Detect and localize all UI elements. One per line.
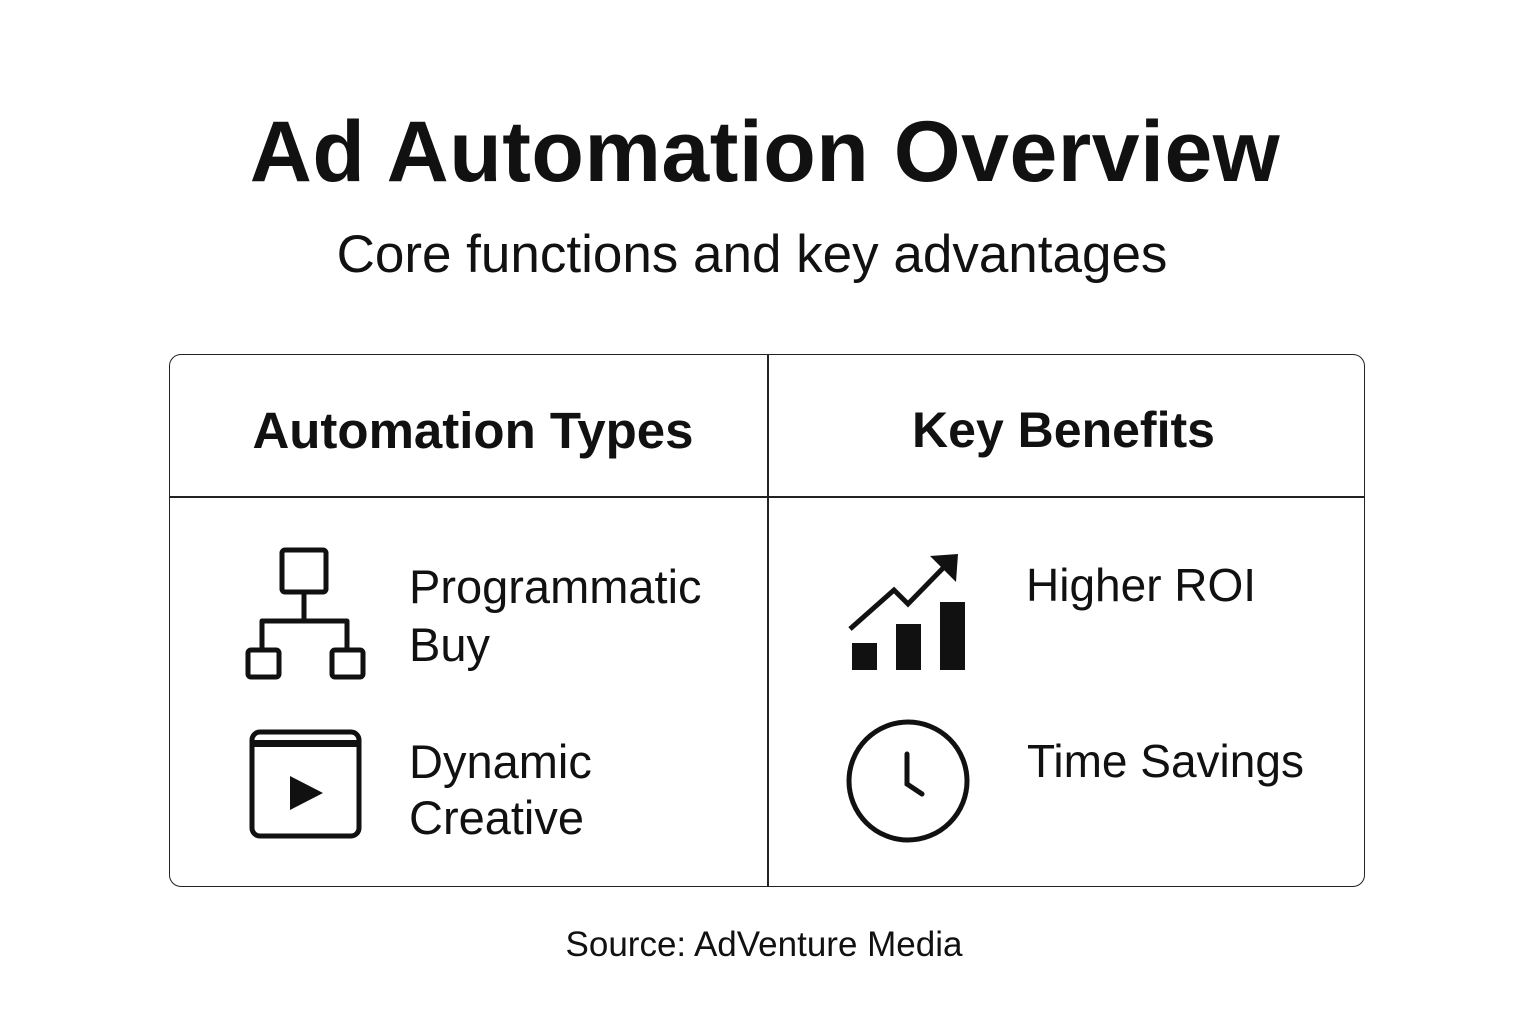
text: dynamic creative: Creative <box>409 791 584 844</box>
text: programmatic buy <box>409 560 702 671</box>
panel: automation types header: Automation Types <box>252 402 694 459</box>
vertical divider <box>767 355 769 886</box>
text: dynamic creative: Dynamic <box>409 735 592 788</box>
text: higher roi: Higher ROI <box>1026 559 1256 611</box>
text: time savings: Time Savings <box>1027 735 1304 787</box>
panel: key benefits header: Key Benefits <box>912 402 1215 458</box>
title: Ad Automation Overview <box>250 104 1280 200</box>
table panel <box>169 354 1365 887</box>
text: programmatic buy: Programmatic <box>409 560 702 613</box>
source: Source: AdVenture Media <box>566 925 962 964</box>
header divider <box>170 496 1364 498</box>
text: dynamic creative <box>409 735 592 844</box>
text: programmatic buy: Buy <box>409 618 490 671</box>
subtitle: Core functions and key advantages <box>337 225 1167 284</box>
